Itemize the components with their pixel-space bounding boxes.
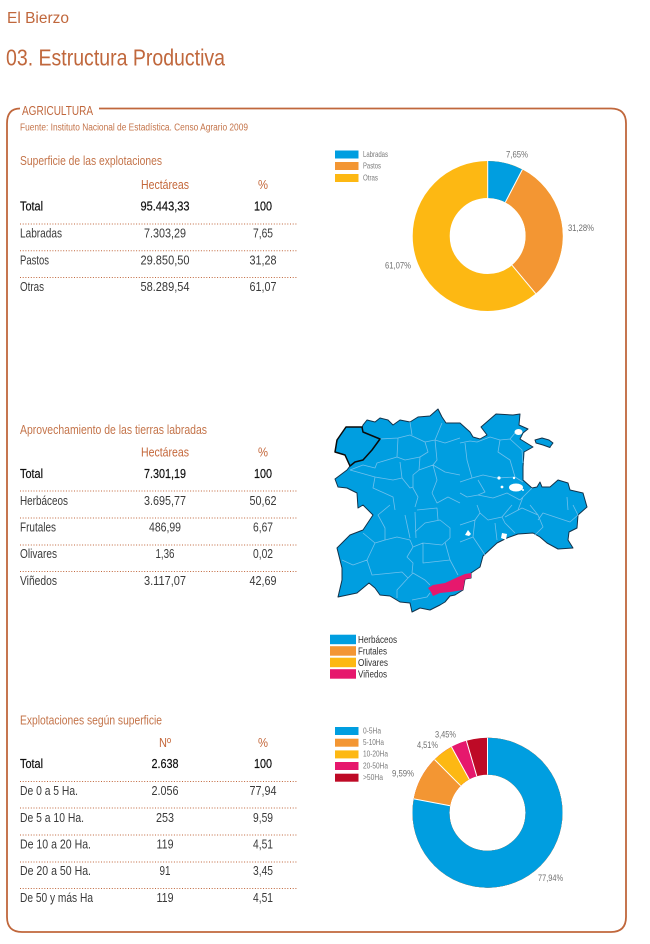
row: herbaceos: 50,62 bbox=[250, 494, 277, 508]
row: otras: Otras bbox=[20, 280, 44, 294]
row: 20 a 50: 3,45 bbox=[253, 864, 273, 878]
row: frutales bbox=[20, 520, 273, 534]
row: frutales: 486,99 bbox=[149, 520, 181, 534]
row: total: 2.638 bbox=[152, 757, 179, 771]
row: pastos: Pastos bbox=[20, 254, 49, 268]
white gaps bbox=[465, 429, 524, 540]
highlighted bierzo district bbox=[335, 427, 380, 466]
row: 50 y mas bbox=[20, 891, 273, 905]
map legend: Olivares bbox=[358, 657, 388, 669]
row: labradas: Labradas bbox=[20, 226, 62, 240]
row: olivares: 1,36 bbox=[156, 547, 175, 561]
legend: 0-5Ha bbox=[363, 726, 381, 736]
legend: 5-10Ha bbox=[363, 737, 384, 747]
legend bbox=[335, 726, 388, 782]
map legend: Frutales bbox=[358, 646, 387, 658]
row: 20 a 50 bbox=[20, 864, 273, 878]
row: total bbox=[20, 467, 272, 481]
row: vinedos bbox=[20, 574, 277, 588]
row: 0 a 5 bbox=[20, 784, 277, 798]
section heading: Explotaciones según superficie bbox=[20, 714, 162, 728]
row: frutales: Frutales bbox=[20, 520, 56, 534]
row: labradas: 7.303,29 bbox=[144, 226, 186, 240]
source note: Fuente: Instituto Nacional de Estadística. Censo Agrario 2009 bbox=[20, 122, 248, 134]
row: total bbox=[20, 200, 272, 214]
row: 5 a 10: 9,59 bbox=[253, 811, 273, 825]
row: 5 a 10: De 5 a 10 Ha. bbox=[20, 811, 84, 825]
column headers: Nº bbox=[159, 736, 171, 750]
row: pastos: 29.850,50 bbox=[140, 254, 190, 268]
row: olivares: Olivares bbox=[20, 547, 57, 561]
column headers: % bbox=[258, 178, 268, 192]
value labels: 31,28% bbox=[568, 223, 594, 233]
row: total: 7.301,19 bbox=[144, 467, 186, 481]
row: vinedos: 42,69 bbox=[250, 574, 277, 588]
row: otras bbox=[20, 280, 277, 294]
legend: 10-20Ha bbox=[363, 748, 388, 758]
island exclave bbox=[535, 438, 553, 448]
row: 10 a 20: 4,51 bbox=[253, 838, 273, 852]
legend: >50Ha bbox=[363, 772, 383, 782]
map legend: Viñedos bbox=[358, 668, 387, 680]
panel heading: AGRICULTURA bbox=[22, 104, 94, 118]
column headers: % bbox=[258, 446, 268, 460]
legend: Pastos bbox=[363, 160, 381, 170]
row: pastos: 31,28 bbox=[250, 254, 277, 268]
vineyard area bbox=[428, 573, 471, 596]
row: herbaceos bbox=[20, 494, 277, 508]
value labels: 9,59% bbox=[392, 768, 414, 778]
row: vinedos: 3.117,07 bbox=[144, 574, 186, 588]
value labels bbox=[385, 150, 594, 270]
row: total bbox=[20, 757, 272, 771]
section heading: Aprovechamiento de las tierras labradas bbox=[20, 423, 207, 437]
row: labradas bbox=[20, 226, 273, 240]
row: olivares: 0,02 bbox=[253, 547, 273, 561]
column headers: Hectáreas bbox=[141, 446, 189, 460]
row: otras: 61,07 bbox=[250, 280, 277, 294]
column headers: % bbox=[258, 736, 268, 750]
column headers bbox=[141, 446, 268, 460]
breadcrumb heading: El Bierzo bbox=[7, 10, 69, 27]
column headers: Hectáreas bbox=[141, 178, 189, 192]
row: otras: 58.289,54 bbox=[140, 280, 190, 294]
section heading: Superficie de las explotaciones bbox=[20, 154, 162, 168]
row: total: Total bbox=[20, 467, 43, 481]
value labels: 7,65% bbox=[506, 150, 528, 160]
column headers bbox=[141, 178, 268, 192]
row: 0 a 5: 77,94 bbox=[250, 784, 277, 798]
row: herbaceos: Herbáceos bbox=[20, 494, 68, 508]
region fill bbox=[335, 409, 587, 612]
row: vinedos: Viñedos bbox=[20, 574, 57, 588]
row: 50 y mas: 119 bbox=[156, 891, 174, 905]
row: total: 100 bbox=[254, 200, 272, 214]
row: total: 100 bbox=[254, 467, 272, 481]
internal municipal boundaries bbox=[342, 422, 578, 600]
row: 50 y mas: 4,51 bbox=[253, 891, 273, 905]
row: 0 a 5: 2.056 bbox=[152, 784, 179, 798]
row: labradas: 7,65 bbox=[253, 226, 273, 240]
value labels bbox=[392, 730, 563, 883]
value labels: 4,51% bbox=[417, 740, 438, 750]
column headers bbox=[159, 736, 268, 750]
row: 20 a 50: De 20 a 50 Ha. bbox=[20, 864, 91, 878]
section: superficie table bbox=[20, 154, 297, 294]
page title: 03. Estructura Productiva bbox=[6, 44, 225, 70]
row: 10 a 20 bbox=[20, 838, 273, 852]
map legend bbox=[330, 634, 397, 680]
row: total: Total bbox=[20, 757, 43, 771]
section: aprovechamiento table bbox=[20, 423, 297, 588]
row: 10 a 20: 119 bbox=[156, 838, 174, 852]
row: frutales: 6,67 bbox=[253, 520, 273, 534]
row: 5 a 10 bbox=[20, 811, 273, 825]
row: olivares bbox=[20, 547, 273, 561]
map legend: Herbáceos bbox=[358, 634, 397, 646]
row: 5 a 10: 253 bbox=[156, 811, 174, 825]
row: total: Total bbox=[20, 200, 43, 214]
row: 0 a 5: De 0 a 5 Ha. bbox=[20, 784, 78, 798]
map: castilla y leon bbox=[335, 409, 587, 612]
legend: 20-50Ha bbox=[363, 760, 388, 770]
legend: Labradas bbox=[363, 149, 388, 159]
legend: Otras bbox=[363, 172, 378, 182]
chart: superficie donut bbox=[335, 149, 594, 294]
donut segments bbox=[431, 161, 544, 294]
row: 50 y mas: De 50 y más Ha bbox=[20, 891, 93, 905]
value labels: 61,07% bbox=[385, 260, 411, 270]
legend bbox=[335, 149, 388, 182]
row: pastos bbox=[20, 254, 277, 268]
row: 20 a 50: 91 bbox=[160, 864, 171, 878]
row: herbaceos: 3.695,77 bbox=[144, 494, 186, 508]
chart: explotaciones donut bbox=[335, 726, 563, 883]
value labels: 77,94% bbox=[538, 873, 563, 883]
value labels: 3,45% bbox=[435, 730, 456, 740]
section: explotaciones table bbox=[20, 714, 297, 905]
row: total: 100 bbox=[254, 757, 272, 771]
donut segments bbox=[414, 738, 544, 869]
row: total: 95.443,33 bbox=[140, 200, 190, 214]
row: 10 a 20: De 10 a 20 Ha. bbox=[20, 838, 91, 852]
